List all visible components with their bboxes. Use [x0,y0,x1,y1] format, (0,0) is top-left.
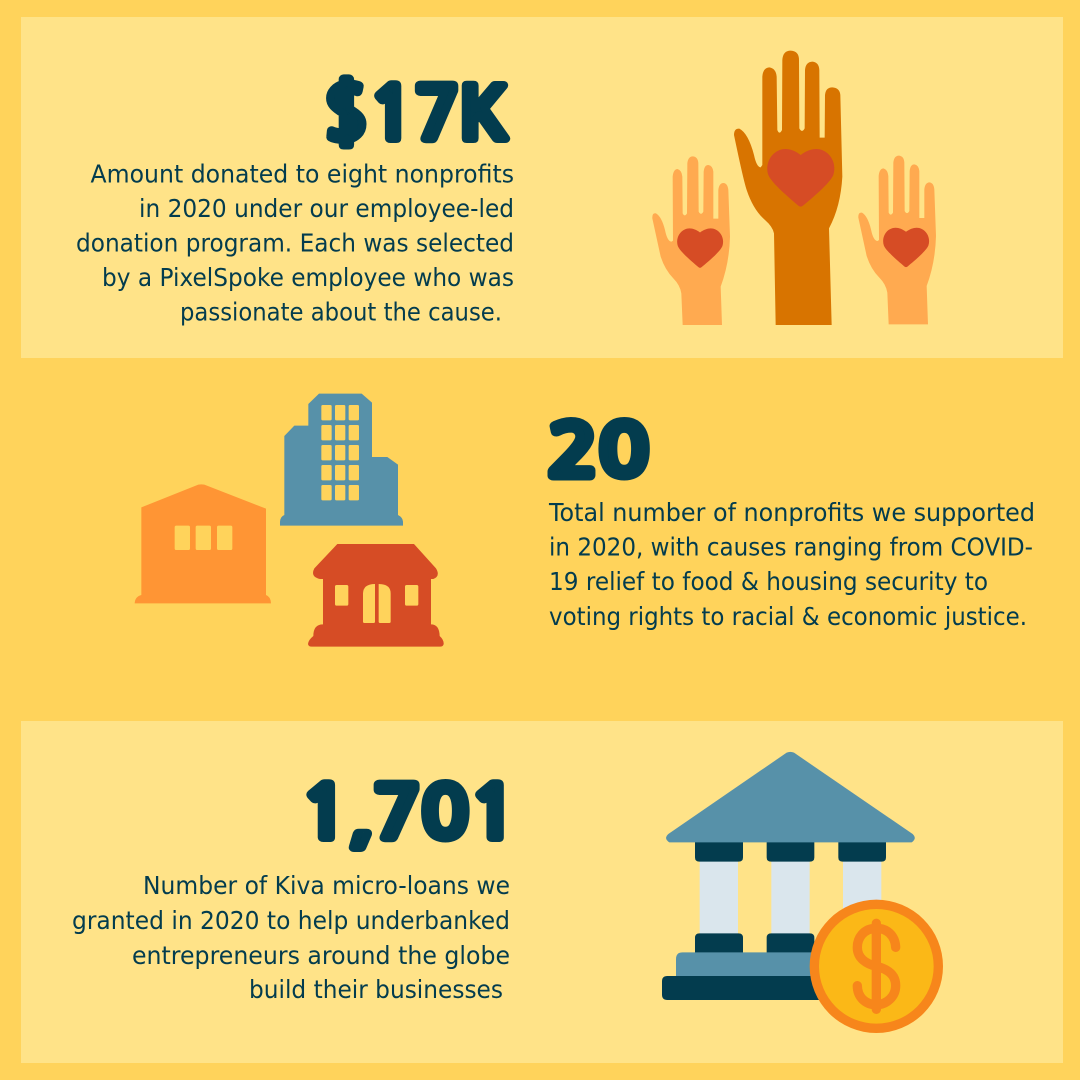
text block: Kiva description: build their businesses [249,975,503,1004]
icon: orange warehouse [135,484,271,603]
heading: 1,701: 1,701 [300,777,518,849]
text block: donation description: donation program. Each was selected [76,229,514,258]
text block: donation description [76,160,514,327]
text block: Kiva description: Number of Kiva micro-loans we [143,871,510,900]
panel: 20 nonprofits [135,394,1035,647]
icon: bank roof [666,752,915,842]
text block: nonprofits description: in 2020, with causes ranging from COVID- [549,533,1033,562]
text block: donation description: Amount donated to eight nonprofits [90,160,514,188]
icon: center large hand [734,51,842,325]
icon: dollar coin [810,900,943,1033]
icon: right small hand [858,156,936,324]
panel: $17K donated [21,17,1063,358]
icon: three raised hands with hearts [652,51,936,325]
icon: bank with dollar coin [662,752,943,1033]
text block: nonprofits description: Total number of nonprofits we supported [548,498,1035,527]
icon: bank steps [662,952,830,1000]
text block: donation description: by a PixelSpoke employee who was [102,263,514,292]
text block: donation description: passionate about the cause. [180,298,502,327]
icon: blue office tower [280,394,403,526]
panel: 1,701 micro-loans [21,721,1063,1063]
text block: Kiva description: entrepreneurs around the globe [132,941,510,970]
icon: bank columns [695,840,886,953]
text block: Kiva description [72,871,510,1004]
heading: $17K: $17K [323,77,508,150]
text block: nonprofits description: voting rights to racial & economic justice. [549,602,1027,631]
text block: nonprofits description: 19 relief to food & housing security to [549,567,988,596]
icon: red house [308,544,444,647]
text block: Kiva description: granted in 2020 to help underbanked [72,906,510,935]
icon: three buildings [135,394,444,647]
icon: left small hand [652,156,730,325]
heading: 20: 20 [547,415,649,487]
text block: nonprofits description [548,498,1035,631]
text block: donation description: in 2020 under our employee-led [139,194,514,223]
